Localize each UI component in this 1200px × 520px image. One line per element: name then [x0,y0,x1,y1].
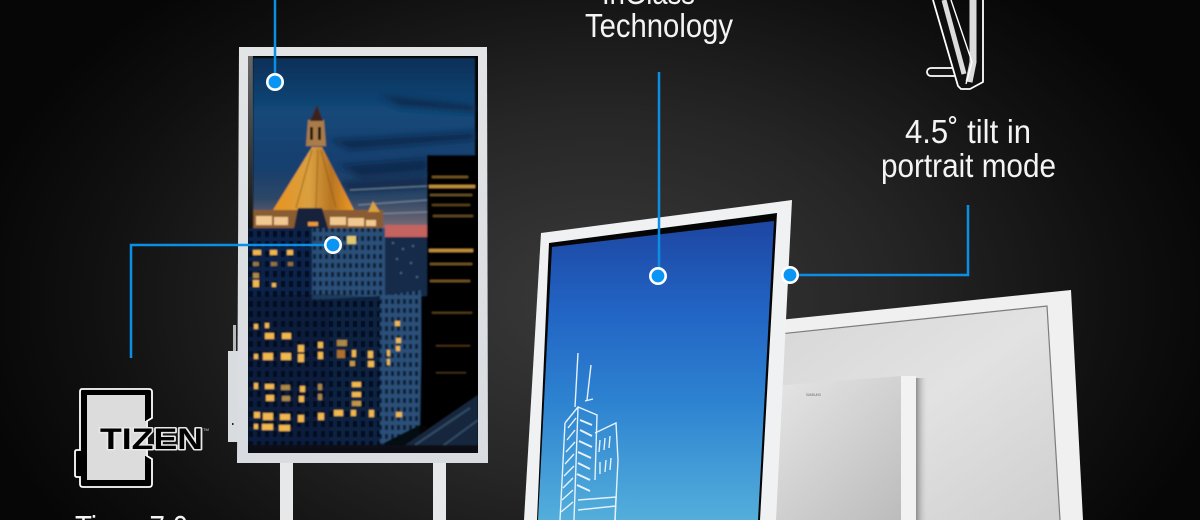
icon: tilt stand [927,0,983,89]
building line drawing [560,353,618,520]
label: tilt in portrait mode [881,113,1056,184]
label: tilt in portrait mode: 4.5˚ tilt in [905,113,1031,150]
city photo [248,58,478,453]
tilted display with blue screen [524,200,792,520]
rear stand [760,376,928,520]
pen accessory [228,325,238,442]
front building [362,296,376,298]
callout: InGlass connector [650,72,666,284]
wordmark: TIZEN [100,423,203,456]
display frame [237,47,488,463]
callout: Tizen connector [131,237,341,358]
back view of display [760,290,1083,520]
main tower [248,228,385,453]
icon: Tizen logo [75,389,209,487]
portrait display with city photo [228,47,488,520]
trademark mark: TM [203,427,209,432]
rooftop foreground [405,395,478,450]
lit windows [253,236,402,431]
label: tilt in portrait mode: portrait mode [881,147,1056,184]
label: InGlass Technology: Technology [585,7,733,44]
callout: tilt connector [782,205,968,283]
brand mark: SAMSUNG [806,392,821,397]
right black tower [427,155,478,453]
stand legs [280,462,446,520]
callout: top of portrait display [267,0,283,90]
lit cornice [253,210,383,228]
pyramid roof [273,147,354,210]
